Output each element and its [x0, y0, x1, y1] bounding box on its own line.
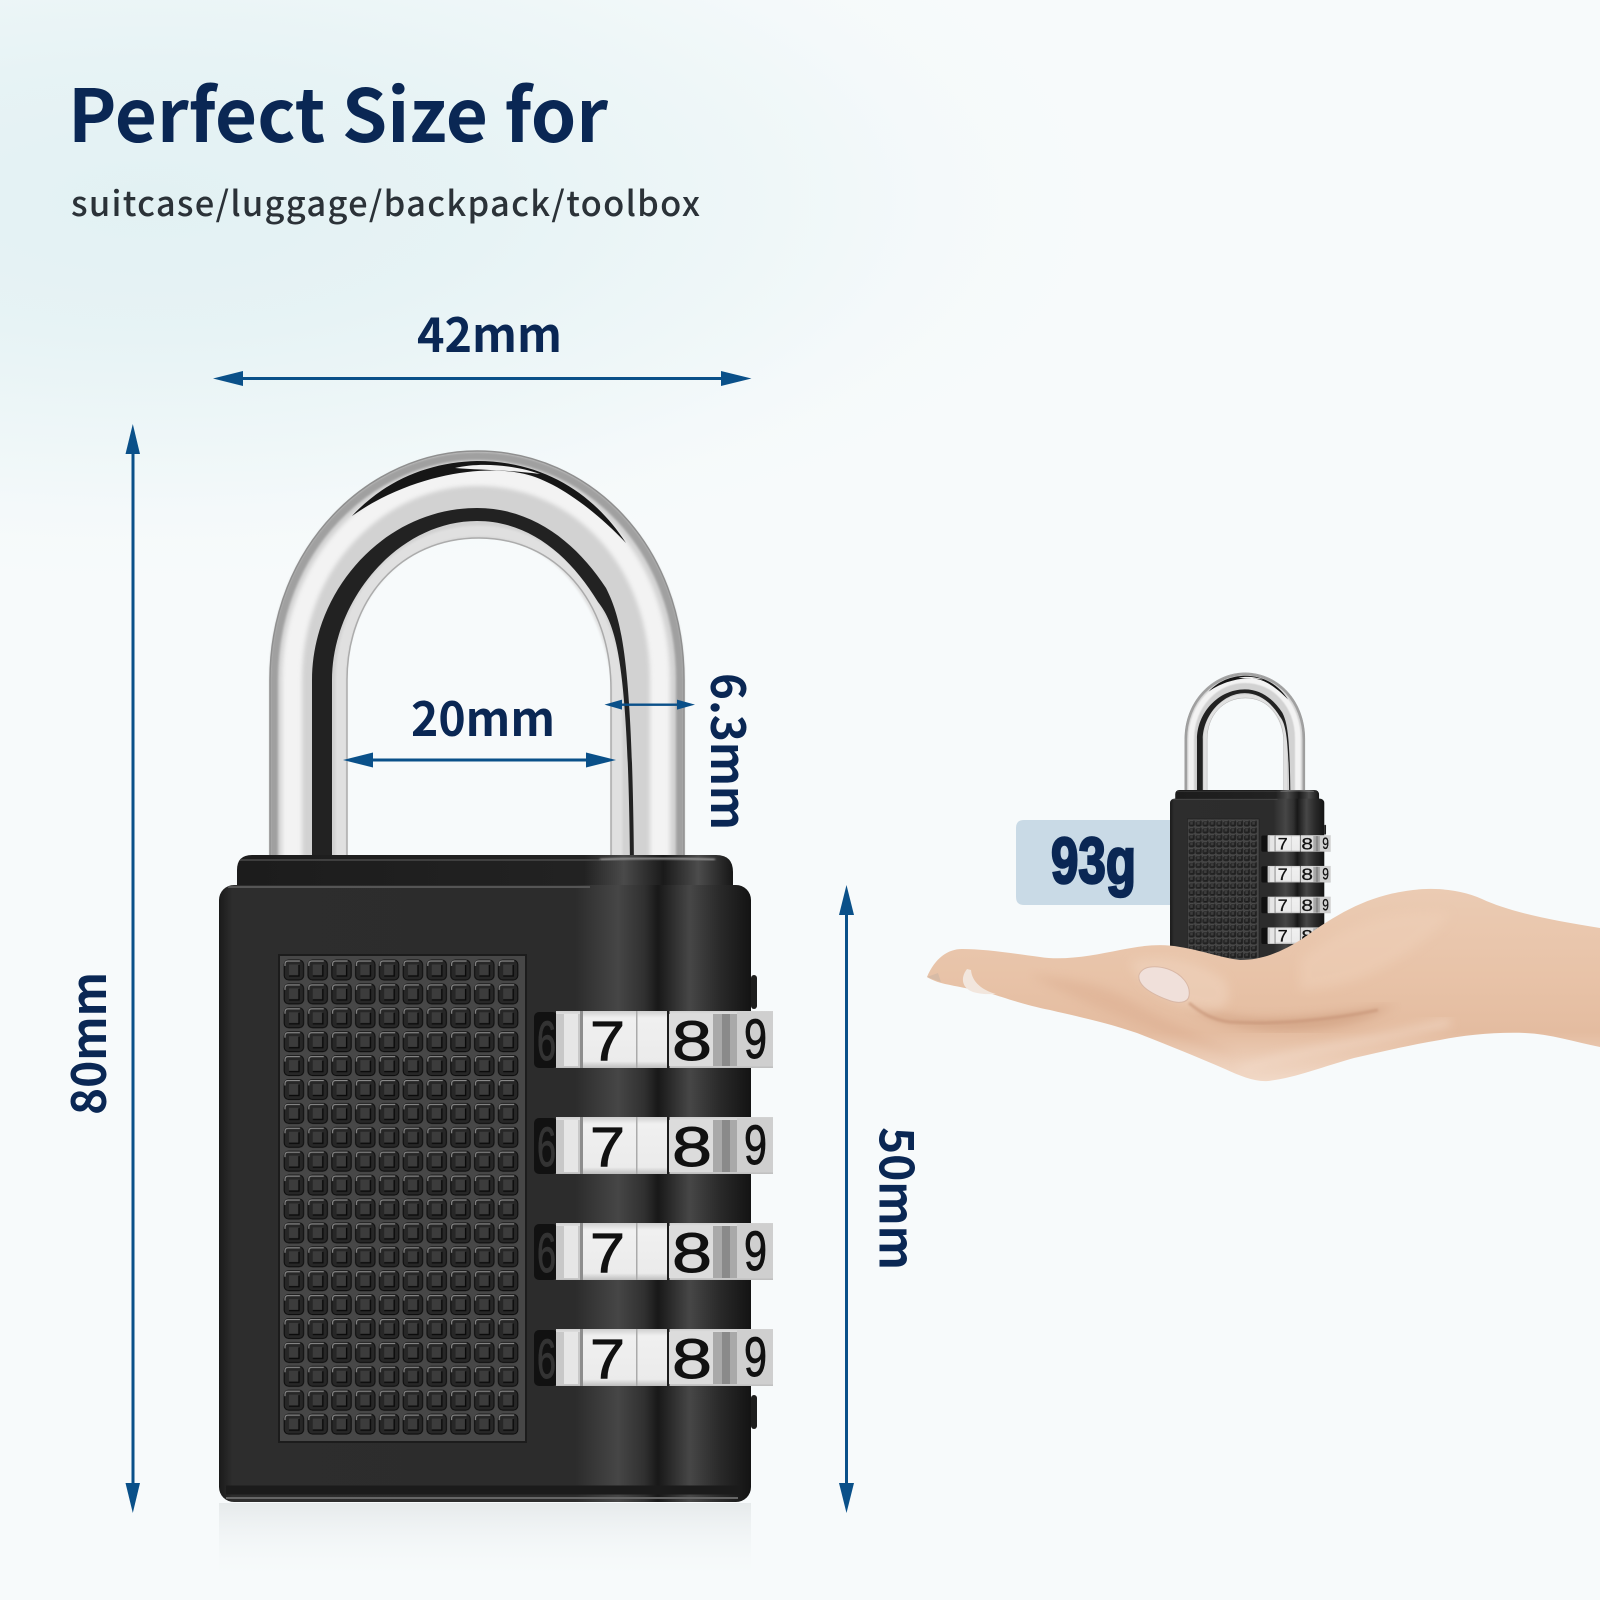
padlock small on hand: 7 [1278, 897, 1288, 915]
padlock small on hand: 8 [1301, 866, 1313, 884]
dial digits large: 7 [590, 1327, 625, 1390]
weight badge [1016, 820, 1175, 905]
dial 2 faces [534, 1117, 773, 1174]
label: 20mm: 20mm [411, 680, 555, 750]
padlock small on hand: 9 [1322, 835, 1329, 853]
dial digits large: 6 [537, 1009, 556, 1072]
hand [927, 889, 1600, 1081]
shackle [270, 451, 684, 862]
dial digits large: 8 [672, 1115, 712, 1178]
label: 50mm: 50mm [866, 1127, 936, 1270]
dial digits large: 7 [590, 1115, 625, 1178]
dial digits large: 6 [537, 1221, 556, 1284]
palm shading [1030, 975, 1240, 1055]
dial 3 faces [534, 1223, 773, 1280]
dial digits large: 6 [537, 1327, 556, 1390]
padlock small on hand [1170, 673, 1331, 978]
subtitle: suitcase/luggage/backpack/toolbox [71, 176, 700, 226]
arrow: 80mm height [126, 424, 140, 1513]
padlock small on hand: 8 [1301, 835, 1313, 853]
thumb crease [1189, 1003, 1378, 1023]
label: 80mm: 80mm [50, 972, 120, 1115]
thumb nail [1139, 967, 1189, 1002]
arrow: 42mm width [213, 371, 752, 386]
reflection under padlock [219, 1503, 751, 1578]
label: 93g: 93g [1051, 824, 1136, 897]
dial digits large [537, 1007, 767, 1390]
label: 42mm: 42mm [417, 296, 562, 366]
dial digits large: 9 [744, 1007, 767, 1070]
lock body [219, 855, 757, 1502]
dial digits large: 7 [590, 1221, 625, 1284]
dial digits large: 6 [537, 1115, 556, 1178]
arrow: 20mm shackle clearance [343, 752, 616, 768]
dial digits large: 9 [744, 1325, 767, 1388]
padlock small on hand: 8 [1301, 928, 1313, 946]
textured grip panel [279, 955, 526, 1442]
dial digits large: 8 [672, 1327, 712, 1390]
padlock small on hand: 9 [1322, 896, 1329, 914]
finger nail [963, 969, 996, 994]
dial 1 faces [534, 1011, 773, 1068]
arrow: 6.3mm shackle thickness [604, 700, 695, 710]
padlock small on hand: 7 [1278, 835, 1288, 853]
padlock small on hand: 7 [1278, 928, 1288, 946]
thumb highlight [1130, 958, 1229, 1010]
dial digits large: 9 [744, 1113, 767, 1176]
padlock small on hand: 7 [1278, 866, 1288, 884]
dial digits large: 8 [672, 1009, 712, 1072]
padlock small on hand: 9 [1322, 866, 1329, 884]
dial digits large: 8 [672, 1221, 712, 1284]
dial 4 faces [534, 1329, 773, 1386]
dial digits large: 9 [744, 1219, 767, 1282]
title: Perfect Size for [68, 58, 608, 164]
arrow: 50mm height [839, 885, 854, 1513]
padlock small on hand: 8 [1301, 897, 1313, 915]
padlock large [219, 451, 773, 1502]
label: 6.3mm: 6.3mm [697, 673, 767, 830]
dial digits large: 7 [590, 1009, 625, 1072]
